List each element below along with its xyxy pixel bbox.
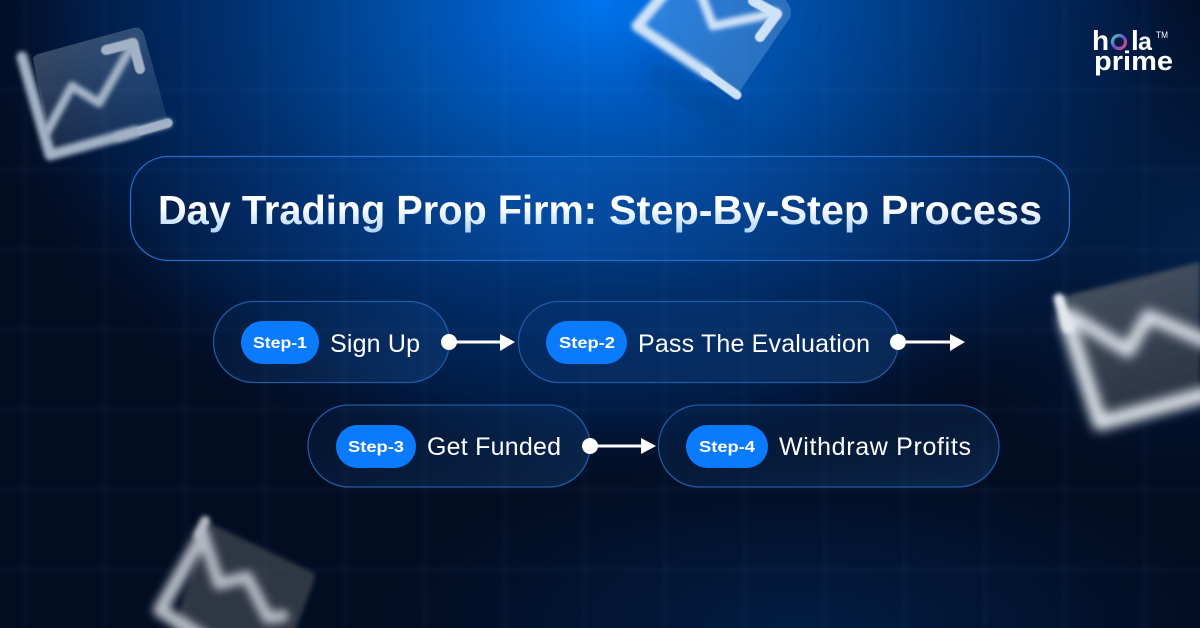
logo: hola prime: prime	[1094, 46, 1173, 76]
step 4: Withdraw Profits	[779, 433, 971, 461]
icon: blurred falling chart, right	[1058, 262, 1200, 423]
step 3: Get Funded	[427, 433, 561, 461]
title	[158, 187, 1042, 233]
title: Day Trading Prop Firm:	[158, 187, 597, 233]
logo: hola prime: TM	[1156, 30, 1168, 40]
step 4	[658, 405, 999, 487]
icon: blurred rising chart, top centre	[637, 0, 791, 125]
step 2: Pass The Evaluation	[638, 330, 870, 358]
arrow: step 1 to step 2	[441, 334, 515, 351]
logo: hola prime: l	[1131, 25, 1139, 56]
title: Step-By-Step Process	[609, 187, 1042, 233]
title panel	[130, 156, 1070, 260]
step 3: Step-3	[348, 439, 404, 456]
step 1	[214, 302, 450, 382]
icon: blurred rising chart, top left	[22, 28, 168, 156]
step 4: Step-4	[699, 439, 755, 456]
step 2: Step-2	[559, 335, 615, 352]
arrow: step 2 onward	[890, 334, 965, 351]
step 1: Step-1	[253, 335, 307, 352]
arrow: step 3 to step 4	[582, 438, 656, 454]
icon: blurred falling chart, bottom left	[160, 521, 315, 628]
logo: hola prime: a	[1138, 28, 1153, 56]
step 1: Sign Up	[330, 330, 420, 358]
logo: hola prime: h	[1092, 25, 1109, 56]
step 3	[308, 405, 590, 487]
step 2	[518, 302, 898, 382]
logo: hola prime	[1092, 25, 1173, 76]
